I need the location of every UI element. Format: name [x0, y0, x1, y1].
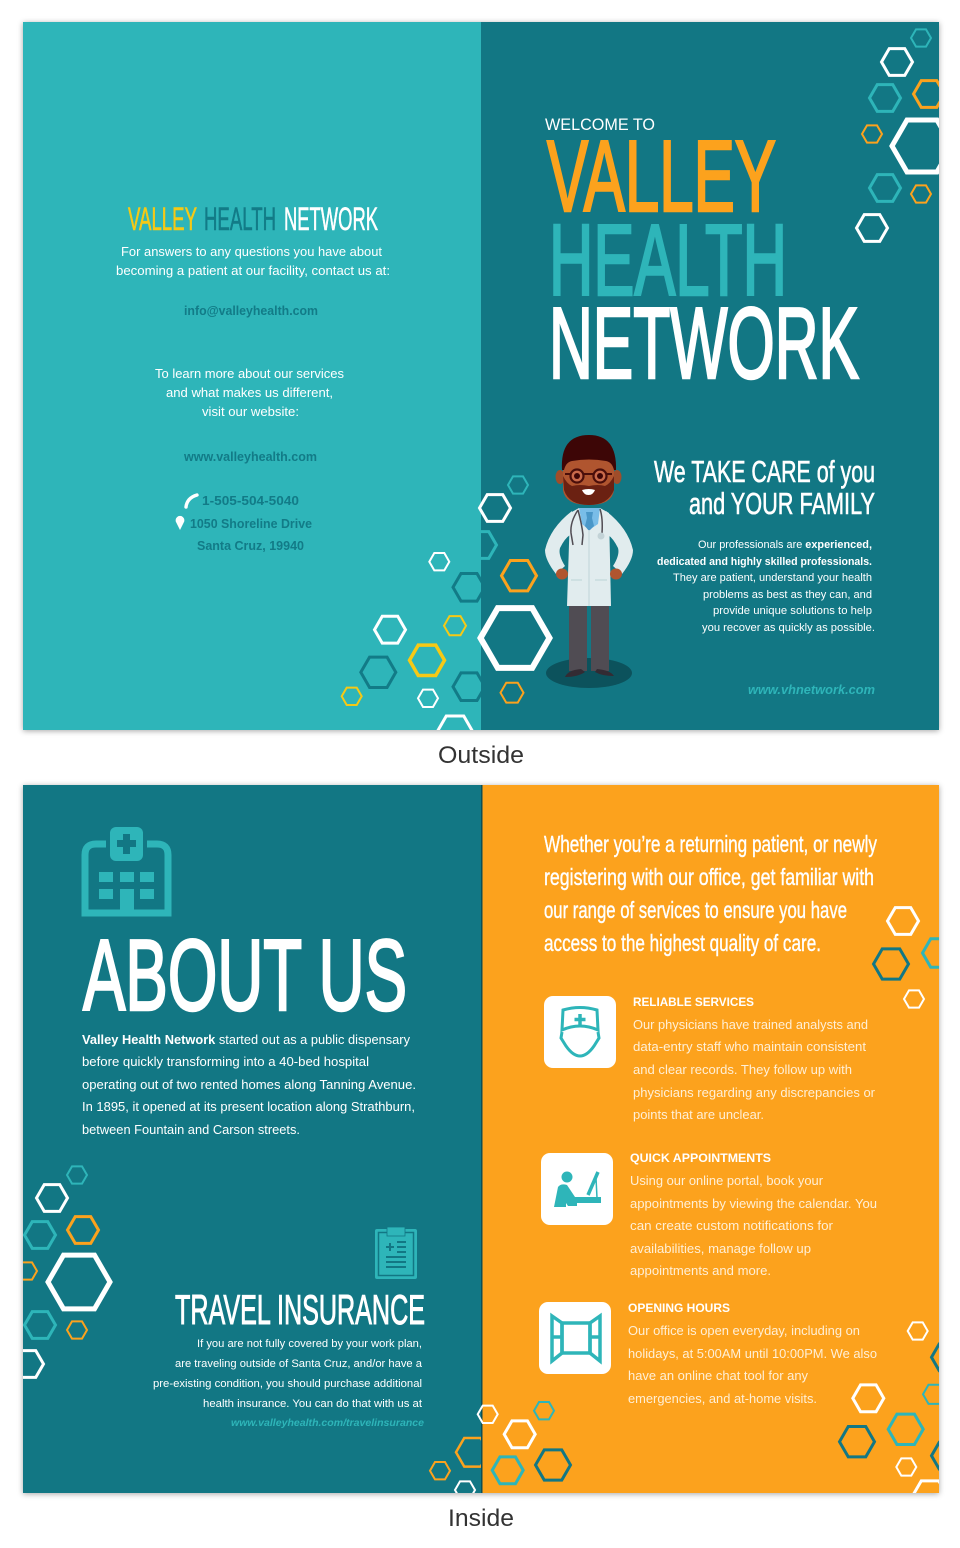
service title: RELIABLE SERVICES — [633, 995, 754, 1009]
contact heading — [128, 201, 378, 237]
phone number: 1-505-504-5040 — [202, 493, 299, 508]
professionals paragraph — [657, 539, 875, 634]
professionals paragraph: They are patient, understand your health — [673, 572, 872, 584]
service text: availabilities, manage follow up — [630, 1241, 811, 1256]
hexagon cluster: inside left — [12, 1166, 110, 1377]
about paragraph: before quickly transforming into a 40-bed hospital — [82, 1054, 369, 1069]
title: VALLEY — [547, 121, 776, 233]
website intro text: To learn more about our services — [155, 366, 344, 381]
travel paragraph: If you are not fully covered by your work plan, — [197, 1338, 422, 1350]
panel: about us — [23, 827, 481, 1493]
intro statement: our range of services to ensure you have — [544, 897, 847, 923]
service text — [628, 1323, 877, 1406]
website: www.valleyhealth.com — [183, 449, 317, 464]
hexagon cluster: lower left — [466, 476, 550, 703]
service title: OPENING HOURS — [628, 1301, 730, 1315]
contact heading: HEALTH — [204, 201, 276, 237]
service text: Using our online portal, book your — [630, 1173, 824, 1188]
icon: window — [552, 1316, 600, 1361]
service text: emergencies, and at-home visits. — [628, 1391, 817, 1406]
service title: QUICK APPOINTMENTS — [630, 1151, 771, 1165]
heading: about us: ABOUT US — [83, 920, 407, 1032]
service text — [630, 1173, 877, 1278]
tagline — [654, 454, 875, 521]
icon: clipboard — [375, 1227, 417, 1279]
service: quick appointments — [541, 1151, 877, 1278]
icon: phone — [186, 495, 197, 507]
service text: Our office is open everyday, including on — [628, 1323, 860, 1338]
service: reliable services — [544, 995, 876, 1122]
service text: appointments and more. — [630, 1263, 771, 1278]
address: 1050 Shoreline Drive — [190, 516, 312, 531]
service text: appointments by viewing the calendar. You — [630, 1196, 877, 1211]
caption: inside: Inside — [448, 1505, 514, 1532]
professionals paragraph: problems as best as they can, and — [703, 589, 872, 601]
travel paragraph — [153, 1338, 423, 1410]
contact intro text — [116, 244, 390, 278]
website intro text: visit our website: — [202, 404, 299, 419]
service text: Our physicians have trained analysts and — [633, 1017, 868, 1032]
about paragraph: Valley Health Network started out as a public dispensary — [82, 1032, 410, 1047]
panel: outside front — [466, 22, 952, 730]
title — [547, 121, 859, 400]
professionals paragraph: Our professionals are experienced, — [698, 539, 872, 551]
service text: holidays, at 5:00AM until 10:00PM. We also — [628, 1346, 877, 1361]
service text — [633, 1017, 876, 1122]
icon: nurse — [561, 1008, 599, 1056]
service text: physicians regarding any discrepancies or — [633, 1085, 876, 1100]
website link: www.vhnetwork.com — [748, 682, 875, 697]
panel: services — [478, 785, 960, 1511]
email: info@valleyhealth.com — [184, 303, 318, 318]
hexagon cluster: outside left — [342, 553, 485, 746]
icon: map pin — [176, 516, 184, 530]
tagline: and YOUR FAMILY — [689, 486, 875, 521]
service: opening hours — [539, 1301, 877, 1406]
website intro text: and what makes us different, — [166, 385, 333, 400]
title: HEALTH — [549, 205, 787, 317]
service text: have an online chat tool for any — [628, 1368, 808, 1383]
service text: data-entry staff who maintain consistent — [633, 1039, 866, 1054]
about paragraph: operating out of two rented homes along Tanning Avenue. — [82, 1077, 416, 1092]
contact intro text: becoming a patient at our facility, contact us at: — [116, 263, 390, 278]
icon: hospital — [85, 827, 168, 913]
illustration: doctor — [545, 435, 633, 688]
about paragraph — [82, 1032, 416, 1137]
contact heading: VALLEY — [128, 201, 197, 237]
hexagon cluster: services bottom right — [838, 1321, 939, 1493]
contact intro text: For answers to any questions you have about — [121, 244, 382, 259]
service text: points that are unclear. — [633, 1107, 764, 1122]
travel paragraph: are traveling outside of Santa Cruz, and/or have a — [175, 1358, 423, 1370]
about paragraph: In 1895, it opened at its present location along Strathburn, — [82, 1099, 415, 1114]
hexagon cluster: top right — [854, 28, 939, 243]
address — [190, 516, 312, 553]
professionals paragraph: provide unique solutions to help — [713, 605, 872, 617]
professionals paragraph: you recover as quickly as possible. — [702, 622, 875, 634]
icon: person at computer — [554, 1172, 601, 1207]
about paragraph: between Fountain and Carson streets. — [82, 1122, 300, 1137]
address: Santa Cruz, 19940 — [197, 538, 304, 553]
professionals paragraph: dedicated and highly skilled professionals. — [657, 556, 872, 568]
travel paragraph: health insurance. You can do that with us at — [203, 1398, 422, 1410]
hexagon cluster: services top — [872, 906, 939, 1009]
service text: and clear records. They follow up with — [633, 1062, 852, 1077]
caption: outside: Outside — [438, 742, 524, 769]
service text: can create custom notifications for — [630, 1218, 834, 1233]
heading: travel insurance: TRAVEL INSURANCE — [175, 1286, 425, 1333]
travel link: www.valleyhealth.com/travelinsurance — [231, 1417, 424, 1429]
panel: outside back — [23, 22, 485, 746]
intro statement: access to the highest quality of care. — [544, 930, 821, 956]
intro statement — [544, 831, 877, 956]
hexagon cluster: inside centre left — [428, 1436, 481, 1493]
welcome label: WELCOME TO — [545, 115, 655, 134]
website intro text — [155, 366, 344, 419]
travel paragraph: pre-existing condition, you should purchase additional — [153, 1378, 422, 1390]
hexagon cluster: services bottom left — [478, 1402, 570, 1484]
contact heading: NETWORK — [284, 201, 378, 237]
